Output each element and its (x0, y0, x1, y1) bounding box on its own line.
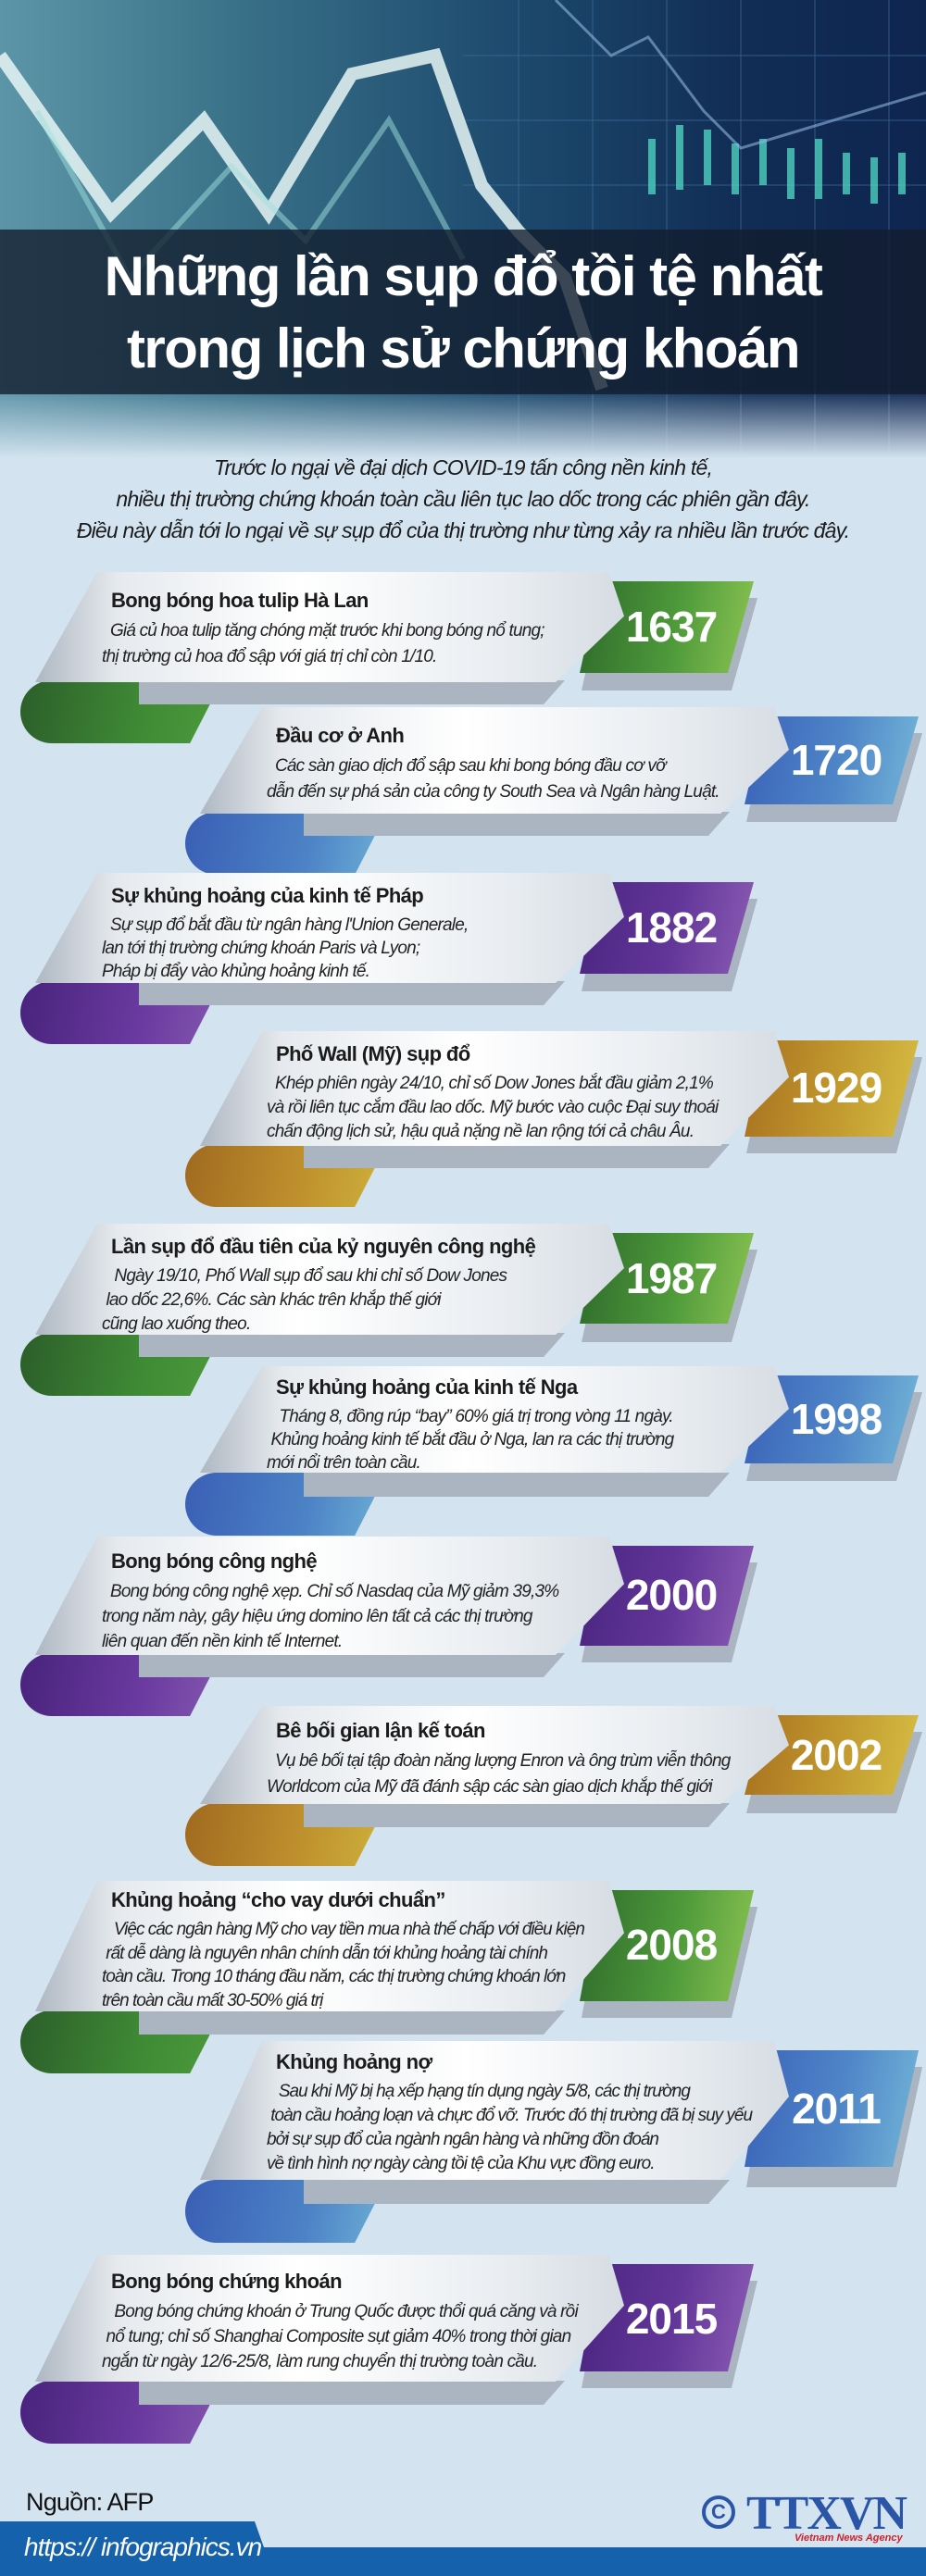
text: debt crisis: Khủng hoảng nợ (276, 2050, 432, 2073)
text: France: Sự sụp đổ bắt đầu từ ngân hàng l'Union Generale, (110, 915, 468, 935)
text: subprime: toàn cầu. Trong 10 tháng đầu năm, các thị trường chứng khoán lớn (102, 1967, 565, 1986)
text: debt crisis: Sau khi Mỹ bị hạ xếp hạng tín dụng ngày 5/8, các thị trường (279, 2082, 690, 2101)
text: debt crisis: toàn cầu hoảng loạn và chực đổ vỡ. Trước đó thị trường đã bị suy yếu (270, 2106, 752, 2125)
intro text: nhiều thị trường chứng khoán toàn cầu liên tục lao dốc trong các phiên gần đây. (116, 487, 810, 511)
text: Wall Street: và rồi liên tục cắm đầu lao dốc. Mỹ bước vào cuộc Đại suy thoái (267, 1098, 718, 1117)
text: tech era: cũng lao xuống theo. (102, 1314, 250, 1334)
text: tech era: Lần sụp đổ đầu tiên của kỷ nguyên công nghệ (111, 1235, 535, 1258)
card: 2015 (20, 2255, 757, 2444)
text: Wall Street: chấn động lịch sử, hậu quả nặng nề lan rộng tới cả châu Âu. (267, 1122, 694, 1141)
text: tulip: Giá củ hoa tulip tăng chóng mặt trước khi bong bóng nổ tung; (110, 621, 544, 641)
text: subprime: rất dễ dàng là nguyên nhân chính dẫn tới khủng hoảng tài chính (106, 1944, 547, 1962)
card: 2008 (20, 1881, 757, 2073)
title band: Những lần sụp đổ tồi tệ nhất (105, 245, 821, 307)
logo: TTXVN: Vietnam News Agency (795, 2532, 903, 2544)
text: Wall Street: Khép phiên ngày 24/10, chỉ số Dow Jones bắt đầu giảm 2,1% (275, 1074, 713, 1093)
year 1998: 1998 (791, 1395, 882, 1443)
year 1882: 1882 (626, 903, 717, 952)
card: 1637 (20, 572, 757, 743)
text: France (102, 884, 468, 981)
year 2008: 2008 (626, 1921, 717, 1969)
text: France: lan tới thị trường chứng khoán Paris và Lyon; (102, 939, 419, 958)
text: subprime: Khủng hoảng “cho vay dưới chuẩn” (111, 1888, 445, 1911)
card: 2002 (185, 1706, 922, 1866)
text: dotcom: Bong bóng công nghệ xẹp. Chỉ số Nasdaq của Mỹ giảm 39,3% (110, 1582, 558, 1601)
year 2002: 2002 (791, 1731, 882, 1779)
logo: TTXVN: C (711, 2500, 726, 2523)
footer bar: https:// infographics.vn (24, 2532, 261, 2561)
text: subprime (102, 1888, 585, 2010)
text: England: Đầu cơ ở Anh (276, 724, 404, 747)
text: dotcom: trong năm này, gây hiệu ứng domino lên tất cả các thị trường (102, 1607, 532, 1626)
text: Wall Street: Phố Wall (Mỹ) sụp đổ (276, 1042, 470, 1065)
text: subprime: Việc các ngân hàng Mỹ cho vay tiền mua nhà thế chấp với điều kiện (114, 1920, 584, 1939)
title band (0, 230, 926, 394)
text: Wall Street (267, 1042, 720, 1141)
text: Enron (267, 1719, 732, 1797)
text: China (102, 2270, 580, 2371)
text: debt crisis: bởi sự sụp đổ của ngành ngân hàng và những đồn đoán (267, 2130, 658, 2149)
text: Russia: mới nổi trên toàn cầu. (267, 1453, 420, 1473)
text: China: Bong bóng chứng khoán (111, 2270, 342, 2293)
text: debt crisis: về tình hình nợ ngày càng tồi tệ của Khu vực đồng euro. (267, 2154, 655, 2173)
text: Enron: Vụ bê bối tại tập đoàn năng lượng Enron và ông trùm viễn thông (275, 1751, 730, 1771)
intro text: Trước lo ngại về đại dịch COVID-19 tấn công nền kinh tế, (214, 455, 712, 479)
text: tulip: thị trường củ hoa đổ sập với giá trị chỉ còn 1/10. (102, 647, 437, 666)
year 1720: 1720 (791, 736, 882, 784)
text: subprime: trên toàn cầu mất 30-50% giá trị (102, 1990, 322, 2010)
text: China: Bong bóng chứng khoán ở Trung Quốc được thổi quá căng và rồi (114, 2302, 578, 2321)
text: Russia: Khủng hoảng kinh tế bắt đầu ở Nga, lan ra các thị trường (270, 1430, 673, 1450)
year 1929: 1929 (791, 1064, 882, 1112)
text: Russia: Tháng 8, đồng rúp “bay” 60% giá trị trong vòng 11 ngày. (279, 1407, 673, 1426)
intro text (77, 455, 849, 542)
card: 2011 (185, 2041, 922, 2243)
text: China: nổ tung; chỉ số Shanghai Composite sụt giảm 40% trong thời gian (106, 2327, 570, 2346)
text: dotcom: Bong bóng công nghệ (111, 1549, 317, 1573)
year 1637: 1637 (626, 603, 717, 651)
card: 1720 (185, 707, 922, 873)
header image background (0, 0, 926, 458)
text: Russia (267, 1375, 674, 1473)
text: tech era (102, 1235, 535, 1334)
text: tulip: Bong bóng hoa tulip Hà Lan (111, 589, 369, 612)
text: tech era: Ngày 19/10, Phố Wall sụp đổ sau khi chỉ số Dow Jones (114, 1266, 507, 1286)
card: 1929 (185, 1031, 922, 1207)
footer bar (0, 2521, 926, 2576)
text: tech era: lao dốc 22,6%. Các sàn khác trên khắp thế giới (106, 1290, 441, 1310)
text: England: Các sàn giao dịch đổ sập sau khi bong bóng đầu cơ vỡ (275, 756, 666, 776)
year 2000: 2000 (626, 1571, 717, 1619)
text: Russia: Sự khủng hoảng của kinh tế Nga (276, 1375, 578, 1399)
title band: trong lịch sử chứng khoán (127, 317, 799, 380)
card: 1987 (20, 1224, 757, 1396)
text: tulip (102, 589, 544, 666)
year 1987: 1987 (626, 1254, 717, 1302)
card: 1882 (20, 873, 757, 1044)
text: Enron: Bê bối gian lận kế toán (276, 1719, 485, 1742)
logo: TTXVN: TTXVN (746, 2487, 906, 2540)
text: France: Pháp bị đẩy vào khủng hoảng kinh tế. (102, 962, 369, 981)
text: China: ngắn từ ngày 12/6-25/8, làm rung chuyển thị trường toàn cầu. (102, 2352, 537, 2371)
year 2015: 2015 (626, 2295, 717, 2343)
card: 2000 (20, 1537, 757, 1716)
text: England (267, 724, 720, 802)
text: debt crisis (267, 2050, 753, 2173)
text: dotcom: liên quan đến nền kinh tế Internet. (102, 1632, 342, 1651)
text: Enron: Worldcom của Mỹ đã đánh sập các sàn giao dịch khắp thế giới (267, 1777, 712, 1797)
text: France: Sự khủng hoảng của kinh tế Pháp (111, 884, 423, 907)
card: 1998 (185, 1366, 922, 1536)
intro text: Điều này dẫn tới lo ngại về sự sụp đổ của thị trường như từng xảy ra nhiều lần trước đây. (77, 518, 849, 542)
text: dotcom (102, 1549, 559, 1651)
year 2011: 2011 (792, 2084, 881, 2133)
source: Nguồn: AFP (26, 2488, 154, 2516)
text: England: dẫn đến sự phá sản của công ty South Sea và Ngân hàng Luật. (267, 782, 720, 802)
